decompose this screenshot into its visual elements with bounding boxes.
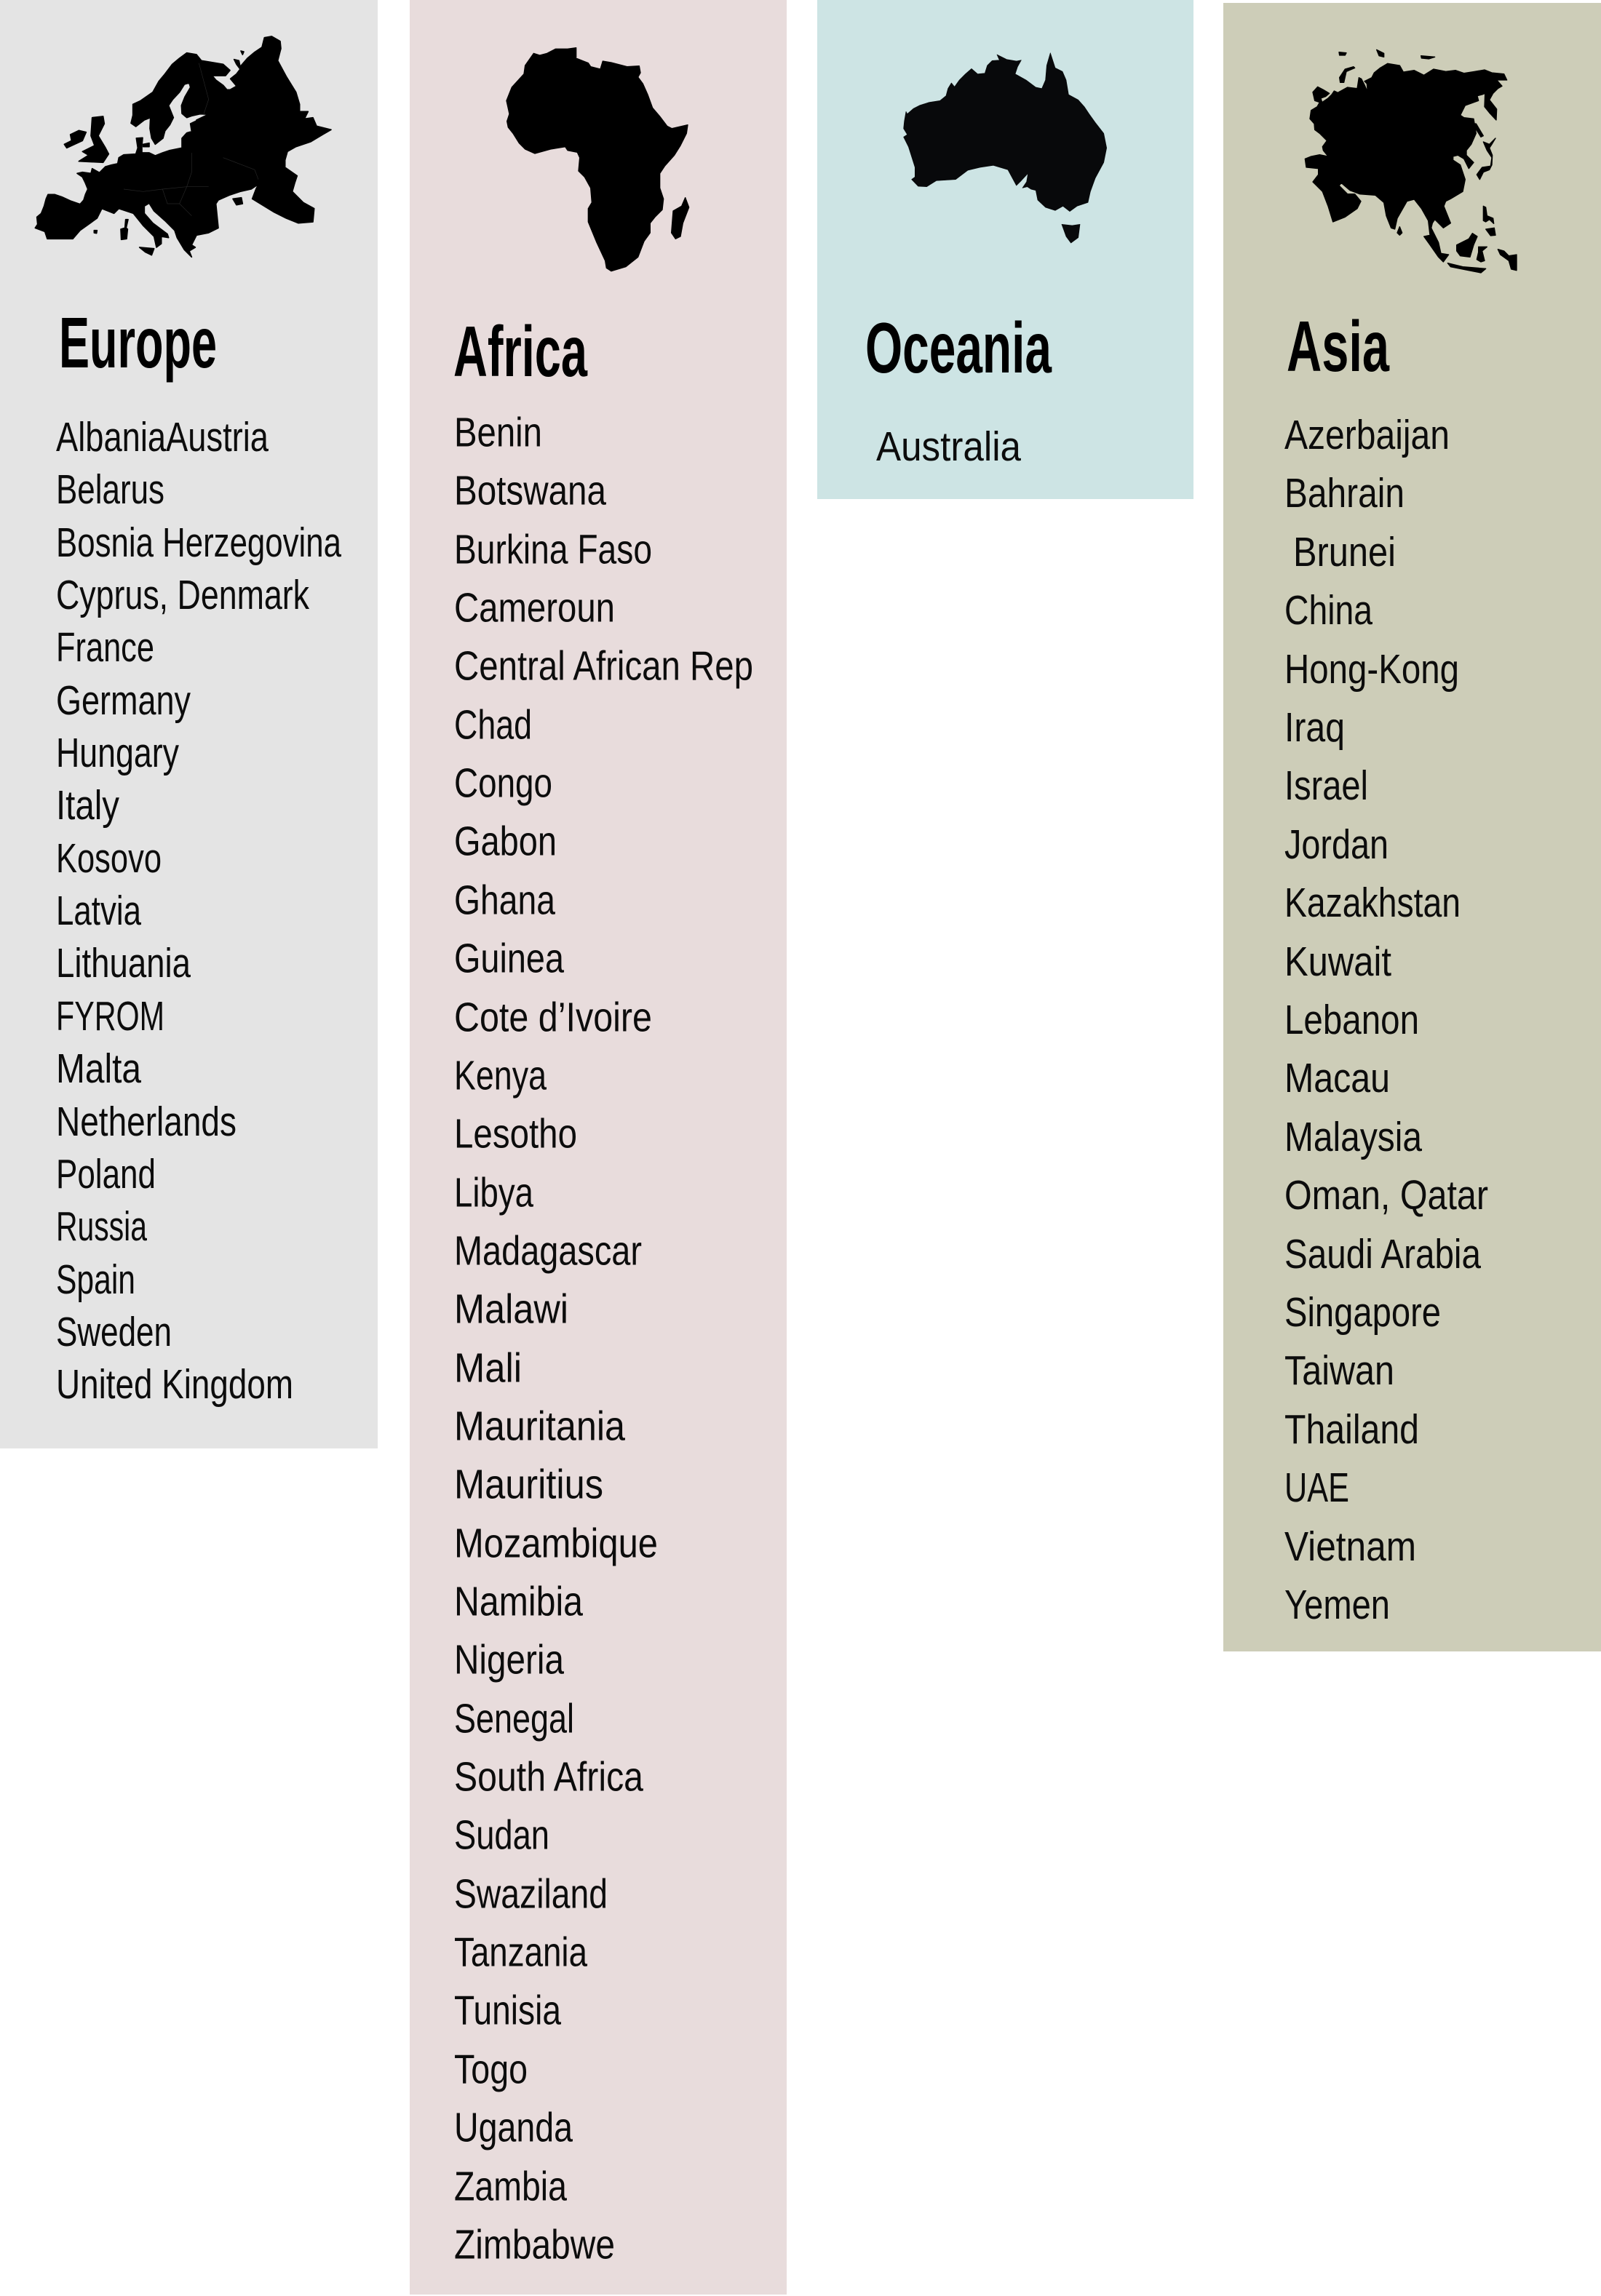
list: Asian countries: China bbox=[1284, 587, 1372, 634]
list: African countries: Tunisia bbox=[454, 1988, 561, 2034]
list: African countries: Namibia bbox=[454, 1579, 583, 1625]
list: African countries: Uganda bbox=[454, 2104, 573, 2150]
list: European countries: Cyprus, Denmark bbox=[56, 572, 309, 618]
list: European countries: Germany bbox=[56, 677, 191, 724]
list: European countries: France bbox=[56, 624, 154, 671]
list: African countries: Nigeria bbox=[454, 1637, 564, 1683]
list: Oceanian countries: Australia bbox=[876, 423, 1021, 470]
list: Asian countries: Hong-Kong bbox=[1284, 646, 1459, 693]
list: African countries: Cote d’Ivoire bbox=[454, 994, 652, 1040]
list: Asian countries: Thailand bbox=[1284, 1406, 1419, 1453]
list: African countries: Mauritania bbox=[454, 1403, 625, 1449]
list: Asian countries: Yemen bbox=[1284, 1582, 1390, 1628]
list: African countries: Kenya bbox=[454, 1052, 547, 1099]
list: Asian countries: Bahrain bbox=[1284, 470, 1405, 517]
list: African countries: Gabon bbox=[454, 818, 557, 864]
list: African countries: Chad bbox=[454, 701, 532, 748]
list: African countries: Lesotho bbox=[454, 1110, 577, 1157]
list: African countries: Zimbabwe bbox=[454, 2222, 615, 2268]
icon: Africa map bbox=[506, 48, 689, 271]
list: Asian countries: Kuwait bbox=[1284, 938, 1391, 985]
list: European countries: Netherlands bbox=[56, 1099, 237, 1145]
list: African countries: South Africa bbox=[454, 1753, 643, 1800]
list: Asian countries: Singapore bbox=[1284, 1289, 1441, 1336]
list: African countries: Benin bbox=[454, 409, 542, 455]
list: African countries: Togo bbox=[454, 2046, 528, 2092]
list: Asian countries: Israel bbox=[1284, 762, 1368, 809]
list: European countries: Malta bbox=[56, 1045, 141, 1092]
list: European countries: Bosnia Herzegovina bbox=[56, 519, 341, 566]
list: African countries: Senegal bbox=[454, 1695, 574, 1742]
list: Asian countries: Oman, Qatar bbox=[1284, 1172, 1488, 1219]
list: Asian countries: Malaysia bbox=[1284, 1114, 1422, 1160]
list: Asian countries: Macau bbox=[1284, 1055, 1390, 1101]
list: African countries: Cameroun bbox=[454, 585, 615, 631]
list: Asian countries: Vietnam bbox=[1284, 1523, 1416, 1570]
Oceania panel background bbox=[817, 0, 1193, 499]
list: Asian countries: Kazakhstan bbox=[1284, 880, 1461, 926]
list: European countries: Italy bbox=[56, 782, 119, 829]
list: European countries: FYROM bbox=[56, 993, 164, 1040]
heading: Oceania: Oceania bbox=[865, 308, 1052, 388]
list: African countries: Burkina Faso bbox=[454, 527, 652, 573]
list: African countries: Swaziland bbox=[454, 1871, 608, 1918]
Europe panel background bbox=[0, 0, 378, 1448]
heading: Europe: Europe bbox=[59, 303, 217, 383]
list: Asian countries: Azerbaijan bbox=[1284, 412, 1450, 458]
heading: Africa: Africa bbox=[453, 311, 588, 391]
heading: Asia: Asia bbox=[1287, 306, 1390, 386]
list: European countries: Belarus bbox=[56, 466, 164, 513]
Africa panel background bbox=[410, 0, 787, 2295]
list: African countries: Tanzania bbox=[454, 1929, 587, 1976]
list: European countries: Spain bbox=[56, 1256, 135, 1303]
list: African countries: Zambia bbox=[454, 2164, 567, 2210]
list: African countries: Madagascar bbox=[454, 1228, 642, 1275]
list: African countries bbox=[454, 409, 753, 2268]
list: Asian countries: Brunei bbox=[1293, 529, 1396, 575]
list: African countries: Central African Rep bbox=[454, 643, 753, 690]
list: European countries bbox=[56, 414, 341, 1408]
list: European countries: Kosovo bbox=[56, 835, 162, 882]
list: Asian countries: Taiwan bbox=[1284, 1347, 1394, 1394]
list: African countries: Botswana bbox=[454, 467, 606, 514]
list: African countries: Sudan bbox=[454, 1811, 549, 1858]
list: African countries: Ghana bbox=[454, 877, 555, 924]
panel: Oceania bbox=[817, 0, 1193, 499]
list: Asian countries: Lebanon bbox=[1284, 997, 1419, 1043]
Asia panel background bbox=[1223, 3, 1601, 1651]
list: European countries: Russia bbox=[56, 1203, 147, 1250]
icon: Europe map bbox=[35, 36, 331, 257]
list: European countries: Hungary bbox=[56, 730, 179, 776]
list: European countries: AlbaniaAustria bbox=[56, 414, 269, 461]
list: Asian countries bbox=[1284, 412, 1488, 1628]
panel: Africa bbox=[410, 0, 787, 2295]
list: Asian countries: UAE bbox=[1284, 1464, 1349, 1511]
list: African countries: Mali bbox=[454, 1344, 522, 1391]
list: African countries: Mauritius bbox=[454, 1461, 603, 1507]
list: European countries: Poland bbox=[56, 1151, 156, 1197]
list: European countries: United Kingdom bbox=[56, 1361, 293, 1408]
list: African countries: Malawi bbox=[454, 1286, 568, 1333]
list: African countries: Libya bbox=[454, 1170, 533, 1216]
icon: Asia map bbox=[1305, 49, 1517, 273]
panel: Europe bbox=[0, 0, 378, 1448]
list: Asian countries: Jordan bbox=[1284, 821, 1389, 868]
list: European countries: Sweden bbox=[56, 1309, 172, 1355]
list: European countries: Lithuania bbox=[56, 940, 191, 986]
list: European countries: Latvia bbox=[56, 888, 141, 934]
icon: Australia map bbox=[904, 53, 1107, 243]
list: Asian countries: Iraq bbox=[1284, 704, 1345, 751]
list: Asian countries: Saudi Arabia bbox=[1284, 1231, 1481, 1277]
list: African countries: Congo bbox=[454, 760, 552, 806]
list: African countries: Mozambique bbox=[454, 1520, 658, 1567]
list: African countries: Guinea bbox=[454, 936, 564, 982]
panel: Asia bbox=[1223, 3, 1601, 1651]
